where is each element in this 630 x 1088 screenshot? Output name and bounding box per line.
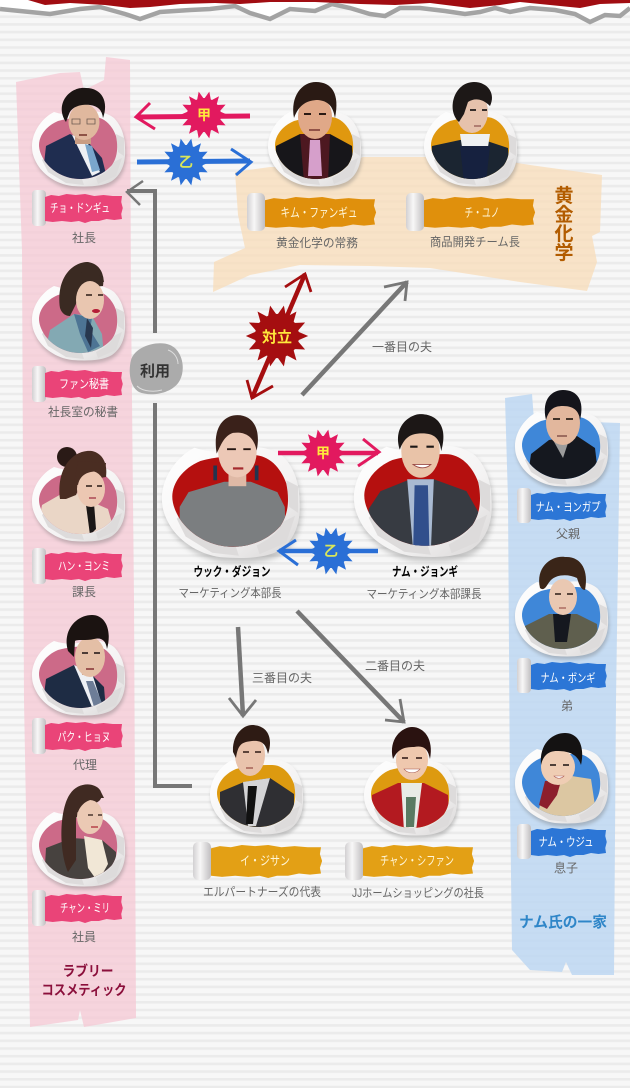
- role: JJホームショッピングの社長: [352, 885, 484, 900]
- arrow: first husband: [302, 282, 432, 395]
- arrow: third husband: [229, 627, 312, 716]
- ribbon curl: [406, 193, 424, 231]
- arrow: gray use line from Ji-san to Cho: [127, 181, 192, 786]
- arrow: third husband: 三番目の夫: [252, 671, 312, 685]
- card: Han Yong-mi: [32, 447, 126, 599]
- name ribbon: [363, 845, 474, 878]
- portrait: [268, 82, 362, 189]
- ribbon curl: [32, 548, 46, 584]
- arrow: second husband: 二番目の夫: [365, 659, 425, 673]
- ribbon curl: [193, 842, 211, 880]
- role: 課長: [72, 585, 96, 599]
- ribbon curl: [517, 488, 531, 523]
- portrait: [515, 390, 609, 489]
- group title: Golden Chemical: 黄: [554, 185, 574, 207]
- role: 社長: [72, 230, 96, 245]
- name ribbon: [45, 370, 123, 399]
- name ribbon: [531, 828, 607, 857]
- group title: Lovely Cosmetic: [42, 963, 126, 998]
- card: Cho Dong-gyu: [32, 88, 126, 245]
- card: Ji Yu-no: [406, 82, 535, 249]
- portrait: [162, 415, 301, 562]
- ribbon curl: [32, 718, 46, 754]
- name: パク・ヒョヌ: [58, 730, 110, 744]
- portrait: [210, 725, 304, 837]
- group title: Lovely Cosmetic: ラブリー: [62, 963, 114, 979]
- badge: use: [130, 343, 183, 394]
- role: 黄金化学の常務: [276, 235, 358, 250]
- name: チャン・ミリ: [60, 901, 110, 915]
- portrait: [424, 82, 518, 189]
- name: チ・ユノ: [464, 206, 500, 220]
- arrow: blue 乙 towards Kim: 乙: [179, 154, 193, 170]
- ribbon curl: [32, 190, 46, 226]
- ribbon curl: [32, 366, 46, 402]
- name ribbon: [45, 552, 123, 581]
- name: チョ・ドンギュ: [50, 201, 110, 215]
- name: イ・ジサン: [240, 854, 290, 868]
- name ribbon: [531, 662, 607, 691]
- name ribbon: [424, 197, 535, 229]
- name: ナム・ジョンギ: [392, 565, 458, 579]
- name: ナム・ウジュ: [538, 835, 594, 849]
- group title: Golden Chemical: 学: [554, 241, 574, 264]
- role: マーケティング本部長: [178, 586, 282, 600]
- card: Park Hyon-u: [32, 615, 126, 772]
- name: ハン・ヨンミ: [58, 559, 110, 573]
- arrow: blue 乙 towards Wook: 乙: [324, 543, 338, 559]
- arrow: first husband: 一番目の夫: [372, 340, 432, 354]
- name: ナム・ボンギ: [540, 671, 596, 685]
- arrow: pink 甲 towards Cho: 甲: [197, 107, 211, 123]
- card: Kim Hwan-gyu: [247, 82, 376, 250]
- portrait: [32, 615, 126, 718]
- arrow: pink 甲 towards Cho: [136, 92, 250, 138]
- name ribbon: [45, 722, 123, 751]
- card: Nam U-ju: [515, 733, 609, 875]
- card: Wook Da-jeong: [162, 415, 301, 600]
- role: 息子: [554, 860, 578, 875]
- name ribbon: [265, 197, 376, 229]
- ribbon curl: [32, 890, 46, 926]
- arrow: pink 甲 towards Nam: [278, 430, 379, 476]
- card: Secretary Fan: [32, 262, 126, 419]
- name: キム・ファンギュ: [280, 206, 358, 220]
- portrait: [354, 414, 493, 561]
- ribbon curl: [345, 842, 363, 880]
- card: Lee Ji-san: [193, 725, 322, 899]
- role: 商品開発チーム長: [430, 235, 520, 249]
- arrow: blue 乙 towards Kim: [137, 139, 251, 185]
- name: チャン・シファン: [380, 854, 454, 868]
- group title: Lovely Cosmetic: コスメティック: [42, 982, 126, 998]
- role: 父親: [556, 527, 580, 541]
- card: Chan Mi-ri: [32, 784, 126, 944]
- arrow: conflict 対立: [246, 274, 311, 398]
- name: ファン秘書: [59, 377, 109, 391]
- portrait: [32, 262, 126, 363]
- portrait: [32, 447, 126, 544]
- role: 弟: [561, 699, 573, 713]
- role: エルパートナーズの代表: [203, 884, 321, 899]
- arrow: second husband: [297, 611, 425, 722]
- portrait: [364, 727, 458, 838]
- role: マーケティング本部課長: [366, 587, 482, 601]
- arrow: conflict 対立: 対立: [262, 328, 292, 346]
- role: 代理: [73, 758, 97, 772]
- group title: Nam family: ナム氏の一家: [519, 914, 607, 931]
- portrait: [32, 88, 126, 189]
- ribbon curl: [517, 658, 531, 693]
- card: Nam Yong-gap: [515, 390, 609, 541]
- card: Nam Jong-gi: [354, 414, 493, 601]
- card: Nam Bong-gi: [515, 557, 609, 713]
- band: Nam family group: [505, 394, 620, 975]
- torn red header: [0, 0, 630, 22]
- arrow: pink 甲 towards Nam: 甲: [316, 445, 330, 461]
- name ribbon: [531, 492, 607, 521]
- name ribbon: [45, 894, 123, 923]
- badge: use: 利用: [140, 363, 170, 380]
- band: Lovely Cosmetic group: [16, 57, 136, 1027]
- role: 社長室の秘書: [48, 404, 118, 419]
- ribbon curl: [517, 824, 531, 859]
- arrow: blue 乙 towards Wook: [279, 528, 378, 574]
- portrait: [515, 557, 609, 659]
- card: Chan Shi-hwan: [345, 727, 484, 900]
- band: Golden Chemical group: [213, 157, 602, 292]
- role: 社員: [72, 929, 96, 944]
- name: ウック・ダジョン: [194, 564, 270, 579]
- name: ナム・ヨンガプ: [536, 500, 600, 514]
- portrait: [515, 733, 609, 826]
- portrait: [32, 784, 126, 889]
- group title: Golden Chemical: 化: [554, 223, 574, 245]
- ribbon curl: [247, 193, 265, 231]
- name ribbon: [45, 194, 123, 223]
- name ribbon: [211, 845, 322, 878]
- group title: Golden Chemical: 金: [554, 204, 574, 226]
